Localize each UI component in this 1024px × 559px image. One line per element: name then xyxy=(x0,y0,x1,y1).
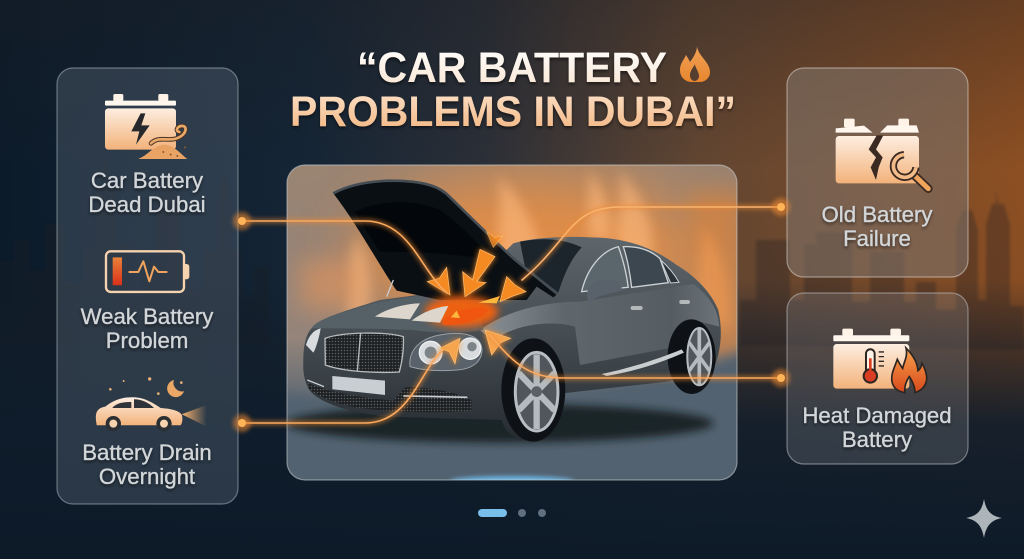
headlight xyxy=(410,333,482,371)
panel: car scene xyxy=(287,165,737,480)
skyline silhouette xyxy=(0,160,1024,350)
label: old battery failure: Old Battery xyxy=(822,202,933,227)
label: second line: Problem xyxy=(106,328,188,353)
side windows xyxy=(582,247,628,292)
grille xyxy=(325,333,403,372)
pagination dots xyxy=(478,509,546,517)
icon: title flame xyxy=(680,46,710,82)
panel: heat damaged battery xyxy=(787,293,968,464)
panel: left problems xyxy=(57,68,238,504)
open hood xyxy=(333,181,557,300)
ground xyxy=(287,346,737,480)
label: battery drain overnight: Battery Drain xyxy=(82,440,212,465)
connector: battery drain overnight xyxy=(242,350,443,423)
label: car battery dead dubai: Car Battery xyxy=(91,168,204,193)
mirror xyxy=(587,287,622,300)
label: second line: Failure xyxy=(843,226,911,251)
rear wheel xyxy=(668,319,716,394)
icon: battery with thermometer and flame xyxy=(833,329,927,393)
title: “CAR BATTERY xyxy=(357,44,667,92)
front wheel xyxy=(501,338,565,442)
icon: car at night xyxy=(96,377,207,431)
lower intake xyxy=(308,383,472,412)
car panel border xyxy=(287,165,737,480)
door handles xyxy=(631,306,643,310)
hood edge xyxy=(333,181,557,294)
shoulder highlight xyxy=(480,284,719,365)
icon: sparkle xyxy=(966,499,1002,538)
car shadow xyxy=(287,404,713,443)
blue glow at base xyxy=(449,473,575,480)
label: weak battery problem: Weak Battery xyxy=(81,304,214,329)
engine bay glow xyxy=(425,296,498,328)
sill highlight xyxy=(602,349,684,376)
title xyxy=(290,44,736,136)
icon: cracked battery with wrench xyxy=(836,119,928,189)
title: PROBLEMS IN DUBAI” xyxy=(290,88,736,136)
label: second line: Battery xyxy=(842,427,913,452)
windshield xyxy=(520,239,582,293)
car body xyxy=(303,237,721,440)
icon: weak battery xyxy=(106,251,189,292)
icon: battery with sand xyxy=(105,94,187,159)
connector dots xyxy=(233,198,790,432)
nose xyxy=(312,295,483,332)
panel: old battery failure xyxy=(787,68,968,277)
connector: car battery dead dubai xyxy=(242,221,447,293)
hood prop xyxy=(387,280,393,297)
engine cover xyxy=(375,303,448,323)
connector: heat damaged battery xyxy=(490,335,781,378)
car xyxy=(287,181,721,443)
label: second line: Overnight xyxy=(99,464,195,489)
label: heat damaged battery: Heat Damaged xyxy=(802,403,952,428)
orange arrows pointing at engine xyxy=(427,232,526,364)
label: second line: Dead Dubai xyxy=(88,192,206,217)
plate xyxy=(332,376,385,395)
flames glow xyxy=(300,170,750,360)
connector: old battery failure xyxy=(522,207,781,280)
